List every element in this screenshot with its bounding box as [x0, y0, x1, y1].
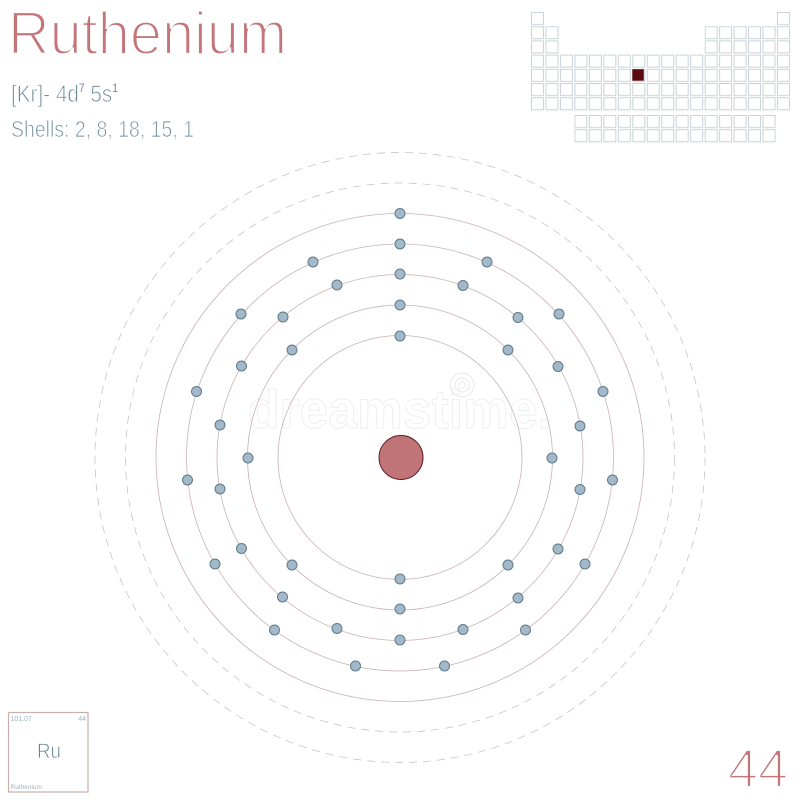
card name: Ruthenium	[10, 784, 42, 791]
electron configuration: 7	[79, 81, 85, 95]
electron configuration: 1	[112, 81, 118, 95]
shell counts: Shells: 2, 8, 18, 15, 1	[11, 116, 194, 142]
shell 2: 8 electrons	[243, 300, 557, 614]
electrons	[182, 208, 618, 671]
card atomic number: 44	[78, 716, 86, 723]
electron configuration: [Kr]- 4d	[11, 81, 90, 108]
element card	[8, 712, 88, 792]
atomic number: 44	[728, 739, 788, 799]
shell 4: 15 electrons	[182, 239, 618, 671]
atomic mass: 101.07	[10, 716, 32, 723]
electron shell orbits	[156, 214, 644, 702]
shell 5: 1 electron	[395, 208, 405, 218]
shell 1: 2 electrons	[395, 331, 405, 584]
card symbol: Ru	[37, 740, 61, 763]
watermark: dreamstime.	[248, 380, 552, 440]
highlighted cell: ruthenium	[632, 69, 644, 81]
electron configuration: 5s	[85, 81, 112, 108]
periodic table locator	[531, 12, 791, 143]
title: element name: Ruthenium	[8, 0, 287, 67]
nucleus	[379, 436, 423, 480]
shell 3: 18 electrons	[215, 269, 585, 645]
empty outer shells (dashed)	[95, 152, 705, 762]
